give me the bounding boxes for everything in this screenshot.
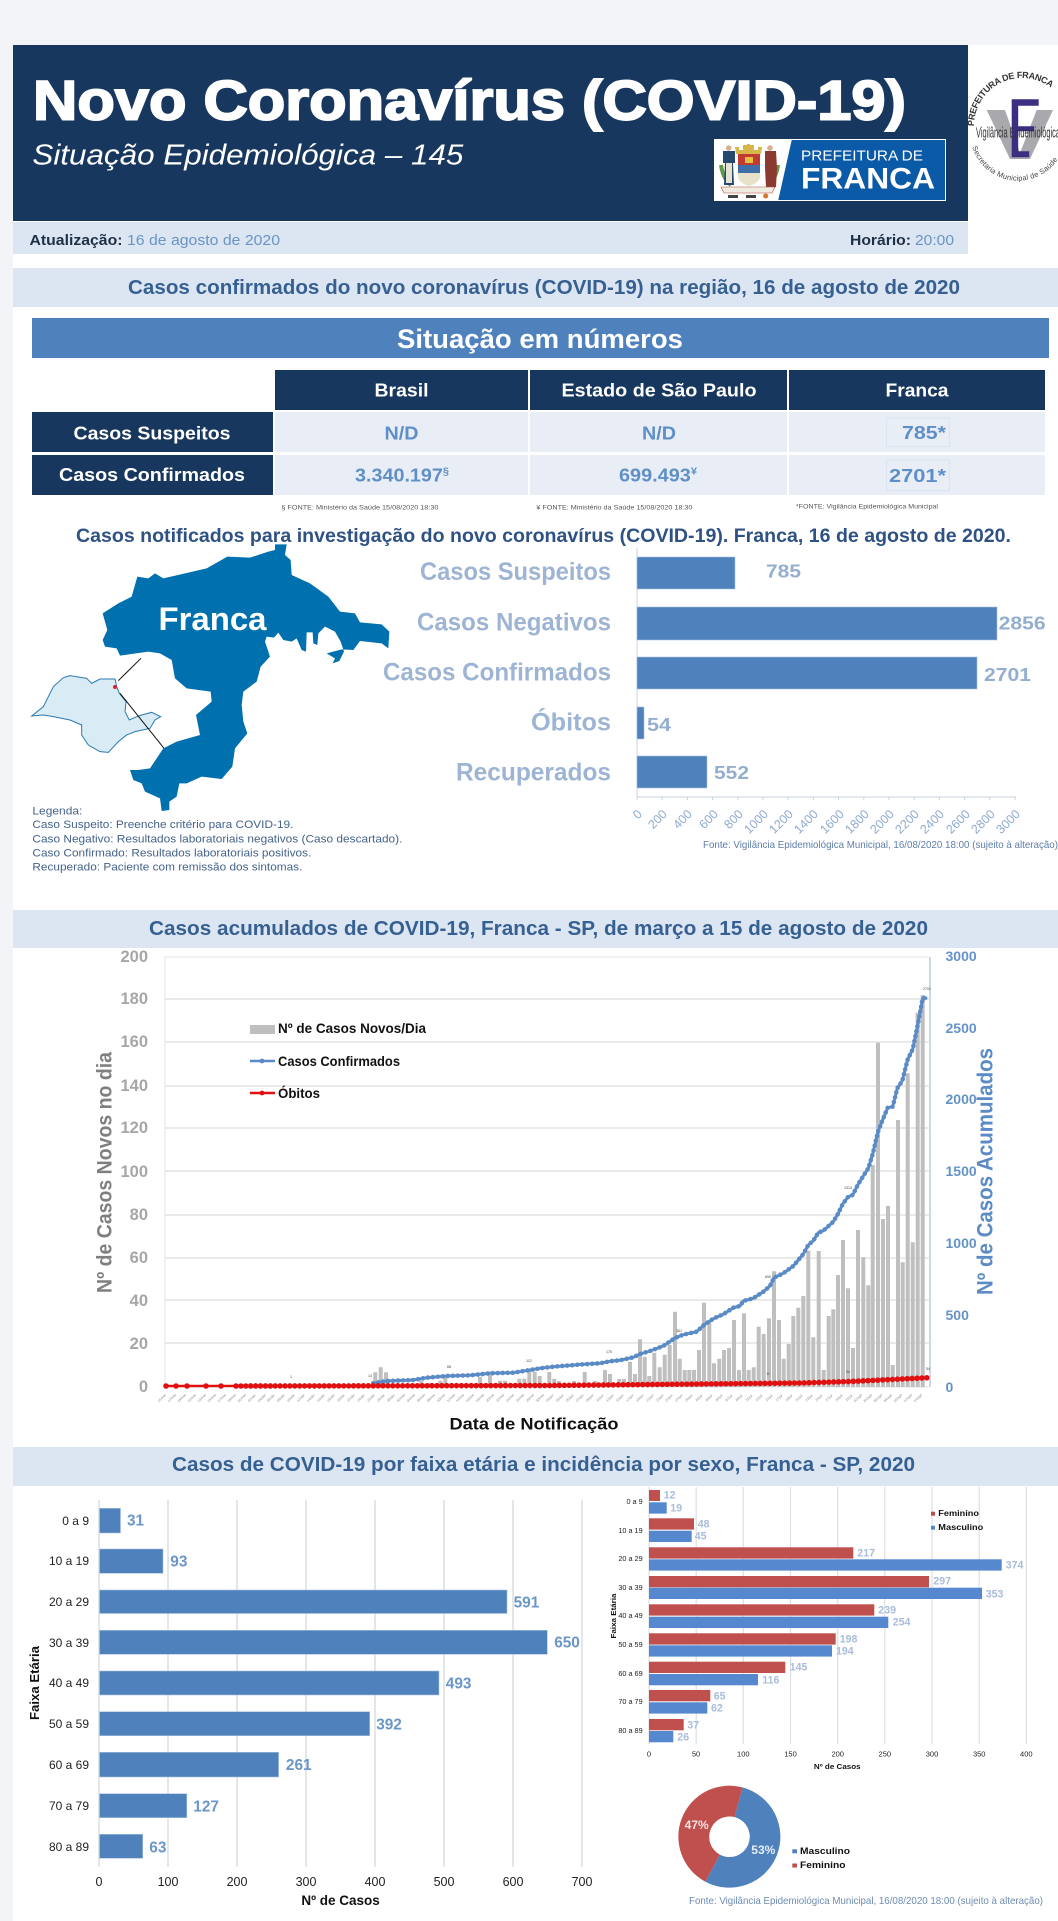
right axis values: 1500 xyxy=(946,1163,977,1179)
section heading: faixa etária e sexo xyxy=(13,1447,1058,1486)
section heading: casos acumulados: Casos acumulados de COVID-19, Franca - SP, de março a 15 de agosto de 2020 xyxy=(149,918,928,940)
title: Novo Coronavírus (COVID-19) xyxy=(33,68,906,132)
bar chart: casos por sexo e faixa etária: 70 a 79 xyxy=(618,1697,643,1706)
date axis labels: 13/jun xyxy=(605,1393,615,1403)
right axis values: 2000 xyxy=(946,1091,977,1107)
bar chart: casos notificados: 2600 xyxy=(943,807,973,837)
bar chart: casos notificados: 785 xyxy=(766,562,801,582)
bar chart: casos por faixa etária: 200 xyxy=(227,1875,247,1889)
bar chart: casos notificados: 1200 xyxy=(766,807,796,837)
date axis labels: 08/abr xyxy=(276,1393,286,1403)
bar chart: casos notificados: Casos Confirmados xyxy=(383,658,611,686)
date axis labels: 05/jun xyxy=(565,1393,575,1403)
date axis labels: 28/mai xyxy=(525,1393,535,1403)
table: situação em números: ¥ xyxy=(691,466,697,477)
date axis labels: 21/jul xyxy=(795,1394,803,1402)
bar chart: casos por faixa etária: 60 a 69 xyxy=(49,1758,89,1772)
donut chart: proporção por sexo xyxy=(678,1786,850,1888)
footnotes xyxy=(281,505,938,511)
legend: donut: Feminino xyxy=(800,1860,846,1871)
bar chart: casos por sexo e faixa etária: 194 xyxy=(836,1645,854,1657)
bar chart: casos por sexo e faixa etária: 65 xyxy=(714,1690,726,1702)
bar chart: casos notificados: 2200 xyxy=(892,807,922,837)
bar chart: casos notificados: Óbitos xyxy=(531,706,611,736)
date axis labels: 26/abr xyxy=(366,1393,376,1403)
bar chart: casos por sexo e faixa etária: 62 xyxy=(711,1702,723,1714)
table: situação em números: Casos Suspeitos xyxy=(74,424,230,444)
left axis values xyxy=(120,948,148,1396)
date axis labels: 09/jun xyxy=(585,1393,595,1403)
bar chart: casos por sexo e faixa etária: 250 xyxy=(879,1750,891,1758)
bar chart: casos por faixa etária: 30 a 39 xyxy=(49,1636,89,1650)
bar chart: casos notificados: 600 xyxy=(696,807,721,832)
date axis labels: 19/jun xyxy=(635,1393,645,1403)
chart legend xyxy=(250,1020,426,1101)
bar chart: casos por sexo e faixa etária: 80 a 89 xyxy=(618,1726,643,1735)
legend text: Caso Suspeito: Preenche critério para COVID-19. xyxy=(32,819,293,831)
date axis labels: 07/jun xyxy=(575,1393,585,1403)
combo chart: casos acumulados xyxy=(94,948,998,1434)
map label: Franca xyxy=(158,601,267,637)
bar chart: casos notificados: 1600 xyxy=(817,807,847,837)
date axis labels: 27/mar xyxy=(217,1392,228,1403)
bar chart: casos por faixa etária: 100 xyxy=(158,1875,178,1889)
date axis labels: 07/jul xyxy=(725,1394,733,1402)
bar chart: casos por faixa etária: 50 a 59 xyxy=(49,1717,89,1731)
date axis labels: 02/abr xyxy=(247,1393,257,1403)
update bar: 20:00 xyxy=(915,233,954,249)
bar chart: casos por sexo e faixa etária: 0 xyxy=(647,1750,651,1758)
bar chart: casos por faixa etária: 70 a 79 xyxy=(49,1799,89,1813)
date axis labels: 12/abr xyxy=(296,1393,306,1403)
bar chart: casos por faixa etária: 31 xyxy=(127,1512,145,1530)
banner: situação em números xyxy=(32,318,1049,358)
bar chart: casos por sexo e faixa etária: 116 xyxy=(762,1674,779,1686)
date axis labels: 10/mai xyxy=(436,1393,446,1403)
bar chart: casos notificados: 800 xyxy=(721,807,746,832)
data point labels: 13 xyxy=(368,1374,372,1378)
bar chart: casos notificados: 0 xyxy=(630,807,645,822)
date axis labels: 09/jul xyxy=(735,1394,743,1402)
bar chart: casos por faixa etária: Faixa Etária xyxy=(28,1645,42,1720)
legend: sexo: Masculino xyxy=(938,1523,983,1532)
bar chart: casos por sexo e faixa etária: 100 xyxy=(737,1750,750,1758)
date axis labels: 12/mai xyxy=(446,1393,456,1403)
bar chart: casos por sexo e faixa etária: 30 a 39 xyxy=(618,1583,643,1592)
bar chart: casos por faixa etária: 40 a 49 xyxy=(49,1676,89,1690)
bar chart: casos por faixa etária: 700 xyxy=(572,1875,592,1889)
legend: sexo xyxy=(931,1509,983,1532)
date axis labels: 17/jul xyxy=(775,1394,783,1402)
bar chart: casos por sexo e faixa etária: 145 xyxy=(790,1661,807,1673)
bar chart: casos por faixa etária: 0 a 9 xyxy=(62,1514,89,1528)
bar chart: casos por faixa etária: 300 xyxy=(296,1875,316,1889)
table: situação em números: 2701* xyxy=(889,466,946,486)
date axis labels: 06/abr xyxy=(266,1393,276,1403)
date axis labels: 15/mar xyxy=(157,1392,168,1403)
legend text xyxy=(32,806,402,873)
date axis labels: 11/jun xyxy=(595,1393,605,1403)
bar chart: casos por sexo e faixa etária: 200 xyxy=(831,1750,844,1758)
update bar xyxy=(13,222,968,254)
update bar: 16 de agosto de 2020 xyxy=(127,233,280,249)
bar chart: casos por sexo e faixa etária: 350 xyxy=(973,1750,985,1758)
legend text: Caso Confirmado: Resultados laboratoriais positivos. xyxy=(32,847,311,859)
date axis labels: 16/abr xyxy=(316,1393,326,1403)
bar chart: casos notificados: 552 xyxy=(714,763,749,783)
date axis labels: 27/jul xyxy=(825,1394,833,1402)
date axis labels: 17/mar xyxy=(167,1392,178,1403)
date axis labels: 21/jun xyxy=(645,1393,655,1403)
section heading: casos confirmados na região xyxy=(13,268,1058,307)
bar chart: casos por faixa etária: 591 xyxy=(514,1594,540,1612)
map: município de Franca xyxy=(103,544,389,811)
right axis values: 2500 xyxy=(946,1020,977,1036)
bar chart: casos por faixa etária: 600 xyxy=(503,1875,523,1889)
date axis labels: 29/mar xyxy=(227,1392,238,1403)
table: situação em números xyxy=(32,370,1045,495)
donut chart: proporção por sexo: 47% xyxy=(685,1818,709,1832)
bar chart: casos por sexo e faixa etária: 45 xyxy=(695,1530,707,1542)
date axis labels: 15/jun xyxy=(615,1393,625,1403)
date axis labels: 14/ago xyxy=(913,1393,923,1403)
bar chart: casos por faixa etária: 63 xyxy=(149,1840,166,1856)
bar chart: casos por sexo e faixa etária: 60 a 69 xyxy=(618,1669,643,1678)
bar chart: casos por sexo e faixa etária: 300 xyxy=(926,1750,938,1758)
table: situação em números: § xyxy=(443,466,449,477)
bar chart: casos por sexo e faixa etária: 40 a 49 xyxy=(618,1611,643,1620)
bar chart: casos notificados: 1800 xyxy=(842,807,872,837)
date axis labels: 21/mar xyxy=(187,1392,198,1403)
footnotes: ¥ FONTE: Ministério da Saúde 15/08/2020 18:30 xyxy=(536,505,693,511)
bar chart: casos notificados: 3000 xyxy=(993,807,1023,837)
bar chart: casos por faixa etária: 650 xyxy=(554,1634,580,1652)
bar chart: casos notificados: 400 xyxy=(670,807,695,832)
bar chart: casos por faixa etária: 93 xyxy=(170,1554,187,1570)
date axis labels: 22/abr xyxy=(346,1393,356,1403)
date axis labels: 23/jun xyxy=(655,1393,665,1403)
bar chart: casos por sexo e faixa etária: 10 a 19 xyxy=(618,1526,643,1535)
bar chart: casos por sexo e faixa etária: 0 a 9 xyxy=(626,1497,643,1506)
date axis labels: 30/abr xyxy=(386,1393,396,1403)
data point labels: 650 xyxy=(765,1275,771,1279)
bar chart: casos por sexo e faixa etária xyxy=(609,1487,1033,1771)
date axis labels: 10/abr xyxy=(286,1393,296,1403)
map: estado de São Paulo xyxy=(32,658,164,752)
section heading: casos acumulados xyxy=(13,910,1058,948)
deaths line xyxy=(166,1378,928,1386)
date axis labels: 23/mar xyxy=(197,1392,208,1403)
right axis values: 0 xyxy=(946,1379,954,1395)
date axis labels: 08/mai xyxy=(426,1393,436,1403)
date axis labels: 28/abr xyxy=(376,1393,386,1403)
data point labels: 1314 xyxy=(844,1186,852,1190)
footnotes: *FONTE: Vigilância Epidemiológica Municipal xyxy=(796,505,938,511)
date axis labels: 04/mai xyxy=(406,1393,416,1403)
bar chart: casos notificados: 2000 xyxy=(867,807,897,837)
legend: donut: Masculino xyxy=(800,1846,850,1857)
right axis values: 500 xyxy=(946,1307,969,1323)
table: situação em números: 3.340.197 xyxy=(355,465,435,485)
data point labels: 112 xyxy=(526,1359,532,1363)
data point labels: 170 xyxy=(606,1350,612,1354)
data point labels: 2701 xyxy=(923,987,931,991)
bar chart: casos por faixa etária: 400 xyxy=(365,1875,385,1889)
data point labels: 361 xyxy=(676,1329,682,1333)
bar chart: casos notificados: 2400 xyxy=(917,807,947,837)
date axis labels: 04/ago xyxy=(863,1393,873,1403)
bar chart: casos notificados: 1400 xyxy=(791,807,821,837)
legend: sexo: Feminino xyxy=(938,1509,979,1518)
date axis labels: 04/abr xyxy=(257,1393,267,1403)
update bar: Atualização: xyxy=(30,233,122,249)
bar chart: casos por sexo e faixa etária: 254 xyxy=(893,1616,910,1628)
bar chart: casos por sexo e faixa etária: 239 xyxy=(878,1604,896,1616)
date axis labels: 03/jul xyxy=(705,1394,713,1402)
date axis labels: 29/jun xyxy=(684,1393,694,1403)
bar chart: casos notificados: 2701 xyxy=(984,665,1031,685)
cumulative cases line xyxy=(373,998,927,1383)
source note: faixa etária: Fonte: Vigilância Epidemiológica Municipal, 16/08/2020 18:00 (sujeito à alteração) xyxy=(689,1896,1043,1907)
logo: Vigilância Epidemiológica xyxy=(968,72,1058,182)
date axis labels: 12/ago xyxy=(903,1393,913,1403)
date axis labels: 03/jun xyxy=(555,1393,565,1403)
bar chart: casos por sexo e faixa etária: 50 a 59 xyxy=(618,1640,643,1649)
right axis values xyxy=(946,948,977,1395)
bar chart: casos por sexo e faixa etária: 50 xyxy=(692,1750,700,1758)
left axis values: 0 xyxy=(139,1378,148,1396)
table: situação em números: 785* xyxy=(902,423,946,443)
data point labels: 54 xyxy=(926,1367,930,1371)
bar chart: casos por sexo e faixa etária: 20 a 29 xyxy=(618,1554,643,1563)
date axis labels: 06/mai xyxy=(416,1393,426,1403)
daily new cases bars xyxy=(373,995,925,1387)
date axis labels: 01/jul xyxy=(695,1394,703,1402)
table: situação em números: Brasil xyxy=(374,381,428,401)
left axis title: Nº de Casos Novos no dia xyxy=(94,1052,116,1293)
date axis labels: 22/mai xyxy=(495,1393,505,1403)
table: situação em números: Estado de São Paulo xyxy=(562,381,756,401)
bar chart: casos por sexo e faixa etária: 400 xyxy=(1020,1750,1033,1758)
section heading: casos notificados: Casos notificados para investigação do novo coronavírus (COVID-19). Franca, 16 de agosto de 2020. xyxy=(76,525,1011,547)
header banner xyxy=(13,45,968,221)
bar chart: casos notificados: Casos Negativos xyxy=(417,609,611,637)
right axis values: 1000 xyxy=(946,1235,977,1251)
bar chart: casos por faixa etária: 261 xyxy=(286,1757,312,1774)
left axis values: 20 xyxy=(130,1335,148,1353)
left axis values: 180 xyxy=(120,990,148,1008)
bar chart: casos por sexo e faixa etária: 19 xyxy=(670,1502,682,1514)
date axis labels: 19/mar xyxy=(177,1392,188,1403)
date axis labels: 25/jul xyxy=(815,1394,823,1402)
bar chart: casos por sexo e faixa etária: 217 xyxy=(857,1547,875,1559)
bar chart: casos notificados: 2856 xyxy=(999,614,1046,634)
update bar: Horário: xyxy=(850,233,911,249)
date axis labels: 30/mai xyxy=(535,1393,545,1403)
bar chart: casos por sexo e faixa etária: 26 xyxy=(677,1731,689,1743)
table: situação em números: 699.493 xyxy=(619,465,684,485)
bar chart: casos notificados: 1000 xyxy=(741,807,771,837)
bar chart: casos por sexo e faixa etária: 12 xyxy=(664,1489,676,1501)
date axis labels: 11/jul xyxy=(745,1394,753,1402)
left axis values: 120 xyxy=(120,1119,148,1137)
date axis labels: 10/ago xyxy=(893,1393,903,1403)
bar chart: casos notificados: 2800 xyxy=(968,807,998,837)
bar chart: casos por faixa etária: 493 xyxy=(446,1676,471,1692)
legend text: Legenda: xyxy=(32,806,82,818)
crest xyxy=(721,144,778,198)
date axis labels: 20/abr xyxy=(336,1393,346,1403)
date axis labels: 23/jul xyxy=(805,1394,813,1402)
chart legend: Óbitos xyxy=(278,1084,320,1101)
logo: Prefeitura de Franca xyxy=(714,139,946,201)
left axis values: 160 xyxy=(120,1033,148,1051)
date axis labels: 08/ago xyxy=(883,1393,893,1403)
date axis labels: 16/mai xyxy=(465,1393,475,1403)
left axis values: 140 xyxy=(120,1077,148,1095)
date axis labels: 26/mai xyxy=(515,1393,525,1403)
date axis labels: 05/jul xyxy=(715,1394,723,1402)
bar chart: casos por sexo e faixa etária: 297 xyxy=(933,1575,951,1587)
date axis labels: 31/mar xyxy=(237,1392,248,1403)
data point labels xyxy=(290,987,931,1379)
bar chart: casos notificados: 200 xyxy=(645,807,670,832)
data point labels: 1 xyxy=(290,1375,292,1379)
table: situação em números: Franca xyxy=(886,381,950,401)
bar chart: casos por faixa etária: 20 a 29 xyxy=(49,1595,89,1609)
date axis labels: 02/mai xyxy=(396,1393,406,1403)
chart legend: Casos Confirmados xyxy=(278,1053,400,1069)
date axis labels: 01/jun xyxy=(545,1393,555,1403)
x axis title: Data de Notificação xyxy=(450,1414,618,1434)
left axis values: 200 xyxy=(120,948,148,966)
bar chart: casos por sexo e faixa etária: 374 xyxy=(1006,1559,1023,1571)
bar chart: casos por faixa etária: Nº de Casos xyxy=(301,1893,380,1908)
table: situação em números: N/D xyxy=(384,424,418,444)
date axis labels: 13/jul xyxy=(755,1394,763,1402)
bar chart: casos notificados: Recuperados xyxy=(456,758,611,786)
table: situação em números: N/D xyxy=(642,424,676,444)
data point labels: 11 xyxy=(766,1372,770,1376)
left axis values: 40 xyxy=(130,1292,148,1310)
banner: situação em números: Situação em números xyxy=(397,324,683,354)
right axis title: Nº de Casos Acumulados xyxy=(972,1048,998,1295)
date axis labels: 29/jul xyxy=(835,1394,843,1402)
donut chart: proporção por sexo: 53% xyxy=(751,1843,776,1857)
bar chart: casos por sexo e faixa etária: 353 xyxy=(986,1588,1003,1600)
data point labels: 34 xyxy=(846,1370,850,1374)
left axis values: 60 xyxy=(130,1249,148,1267)
bar chart: casos por sexo e faixa etária: 150 xyxy=(784,1750,797,1758)
date axis labels: 02/ago xyxy=(853,1393,863,1403)
bar chart: casos por sexo e faixa etária: Faixa Etária xyxy=(609,1593,618,1638)
date axis labels: 24/mai xyxy=(505,1393,515,1403)
date axis labels: 14/abr xyxy=(306,1393,316,1403)
table: situação em números: Casos Confirmados xyxy=(59,465,245,485)
subtitle: Situação Epidemiológica – 145 xyxy=(32,140,464,172)
section heading: faixa etária e sexo: Casos de COVID-19 por faixa etária e incidência por sexo, Franca - SP, 2020 xyxy=(172,1454,915,1476)
legend: donut xyxy=(792,1846,850,1871)
bar chart: casos por faixa etária: 500 xyxy=(434,1875,454,1889)
date axis labels: 25/mar xyxy=(207,1392,218,1403)
date axis labels: 17/jun xyxy=(625,1393,635,1403)
bar chart: casos notificados: 54 xyxy=(647,715,671,735)
bar chart: casos por sexo e faixa etária: 37 xyxy=(687,1719,699,1731)
bar chart: casos por faixa etária xyxy=(28,1500,592,1908)
bar chart: casos notificados: Casos Suspeitos xyxy=(420,558,611,586)
left axis values: 100 xyxy=(120,1163,148,1181)
bar chart: casos por sexo e faixa etária: Nº de Casos xyxy=(814,1762,861,1771)
date axis labels: 14/mai xyxy=(455,1393,465,1403)
bar chart: casos notificados xyxy=(383,548,1046,837)
date axis labels: 20/mai xyxy=(485,1393,495,1403)
date axis labels: 31/jul xyxy=(845,1394,853,1402)
logo: Vigilância Epidemiológica: PREFEITURA DE FRANCA xyxy=(968,72,1052,126)
bar chart: casos por sexo e faixa etária: 198 xyxy=(840,1633,857,1645)
date axis labels: 06/ago xyxy=(873,1393,883,1403)
date axis labels: 18/mai xyxy=(475,1393,485,1403)
bar chart: casos por faixa etária: 127 xyxy=(193,1798,219,1816)
date axis labels: 24/abr xyxy=(356,1393,366,1403)
bar chart: casos por faixa etária: 10 a 19 xyxy=(49,1554,89,1568)
section heading: casos confirmados na região: Casos confirmados do novo coronavírus (COVID-19) na região, 16 de agosto de 2020 xyxy=(128,277,960,299)
chart legend: Nº de Casos Novos/Dia xyxy=(278,1020,426,1036)
date axis labels: 15/jul xyxy=(765,1394,773,1402)
logo: Prefeitura de Franca: PREFEITURA DE xyxy=(801,148,923,164)
date axis labels xyxy=(157,1392,923,1403)
footnotes: § FONTE: Ministério da Saúde 15/08/2020 18:30 xyxy=(281,505,439,511)
date axis labels: 25/jun xyxy=(664,1393,674,1403)
left axis values: 80 xyxy=(130,1206,148,1224)
date axis labels: 19/jul xyxy=(785,1394,793,1402)
bar chart: casos por faixa etária: 392 xyxy=(376,1716,402,1734)
date axis labels: 18/abr xyxy=(326,1393,336,1403)
bar chart: casos por sexo e faixa etária: 48 xyxy=(698,1518,710,1530)
date axis labels: 27/jun xyxy=(674,1393,684,1403)
logo: Prefeitura de Franca: FRANCA xyxy=(801,162,935,196)
legend text: Caso Negativo: Resultados laboratoriais negativos (Caso descartado). xyxy=(32,833,402,845)
bar chart: casos por faixa etária: 0 xyxy=(96,1875,103,1889)
legend text: Recuperado: Paciente com remissão dos sintomas. xyxy=(32,861,302,873)
data point labels: 68 xyxy=(447,1365,451,1369)
right axis values: 3000 xyxy=(946,948,977,964)
bar chart: casos por faixa etária: 80 a 89 xyxy=(49,1840,89,1854)
logo: Vigilância Epidemiológica: Secretaria Municipal de Saúde xyxy=(972,146,1057,182)
